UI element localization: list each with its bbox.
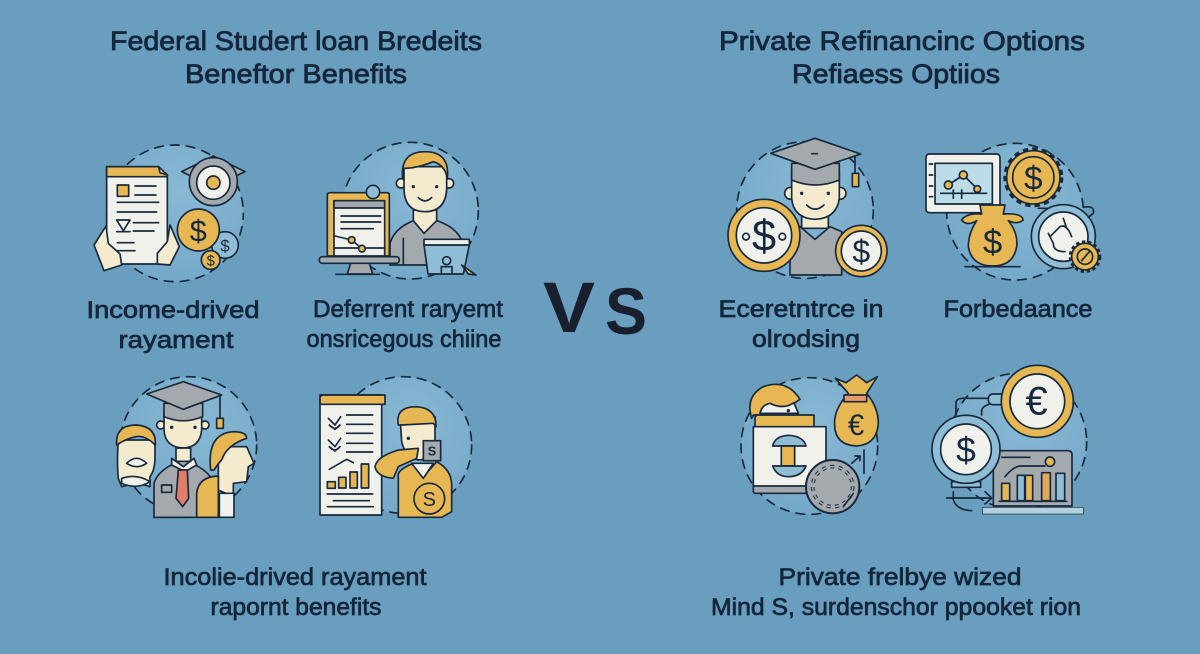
icon: person with checklist and chart	[320, 377, 472, 517]
icon: coin magnifier and bar chart laptop: €	[1026, 380, 1048, 424]
icon: income-driven repayment document and coins: $	[220, 237, 230, 256]
icon: forbearance monitor, gear and money bag: $	[983, 223, 1002, 261]
heading: private refinancing: Refiaess Optiios	[792, 59, 1000, 89]
icon: coin magnifier and bar chart laptop: $	[956, 431, 976, 470]
icon: person with checklist and chart: S	[428, 445, 436, 459]
heading: federal benefits: Beneftor Benefits	[185, 59, 407, 89]
label: incolie-drived rayament: rapornt benefits	[210, 594, 382, 621]
label: private frelbye wized	[711, 564, 1081, 621]
heading: federal benefits	[110, 26, 482, 89]
icon: coin magnifier and bar chart laptop	[932, 365, 1087, 514]
label: ecerettntrce in olrodsing	[718, 296, 884, 353]
label: ecerettntrce in olrodsing: olrodsing	[752, 326, 860, 353]
icon: forbearance monitor, gear and money bag: $	[1024, 160, 1043, 197]
label: forbedaance: Forbedaance	[944, 296, 1092, 323]
icon: graduate with coins: $	[752, 213, 776, 261]
heading: private refinancing: Private Refinancinc Options	[719, 26, 1085, 56]
label: private frelbye wized: Mind S, surdenschor ppooket rion	[711, 594, 1081, 621]
label: private frelbye wized: Private frelbye wized	[778, 564, 1022, 591]
icon: income-driven repayment document and coins: $	[190, 215, 207, 249]
heading: private refinancing	[719, 26, 1085, 89]
label: ecerettntrce in olrodsing: Eceretntrce in	[718, 296, 884, 323]
label: deferrent rayment: onsricegous chiine	[306, 326, 502, 353]
icon: book, euro money bag and chain coin	[741, 375, 878, 514]
label: income-drived rayament: Income-drived	[86, 297, 260, 324]
label: incolie-drived rayament: Incolie-drived rayament	[164, 564, 427, 591]
icon: graduate with coins: $	[852, 234, 870, 270]
heading: federal benefits: Federal Studert loan Bredeits	[110, 26, 482, 56]
label: incolie-drived rayament	[164, 564, 427, 621]
label: deferrent rayment: Deferrent raryemt	[313, 296, 503, 323]
icon: person with checklist and chart: S	[423, 489, 436, 511]
icon: deferment person at monitor	[319, 142, 478, 279]
versus label: V	[543, 269, 595, 348]
versus label: S	[605, 274, 647, 348]
label: income-drived rayament	[86, 297, 260, 354]
icon: income-driven repayment document and coins	[94, 145, 245, 282]
versus label	[543, 269, 647, 348]
icon: income-driven repayment document and coins: $	[207, 254, 215, 270]
label: deferrent rayment	[306, 296, 503, 353]
icon: graduate with family	[117, 377, 257, 517]
label: income-drived rayament: rayament	[118, 327, 234, 354]
icon: graduate with coins	[728, 138, 887, 278]
icon: book, euro money bag and chain coin: €	[848, 409, 864, 442]
icon: forbearance monitor, gear and money bag	[926, 143, 1100, 280]
